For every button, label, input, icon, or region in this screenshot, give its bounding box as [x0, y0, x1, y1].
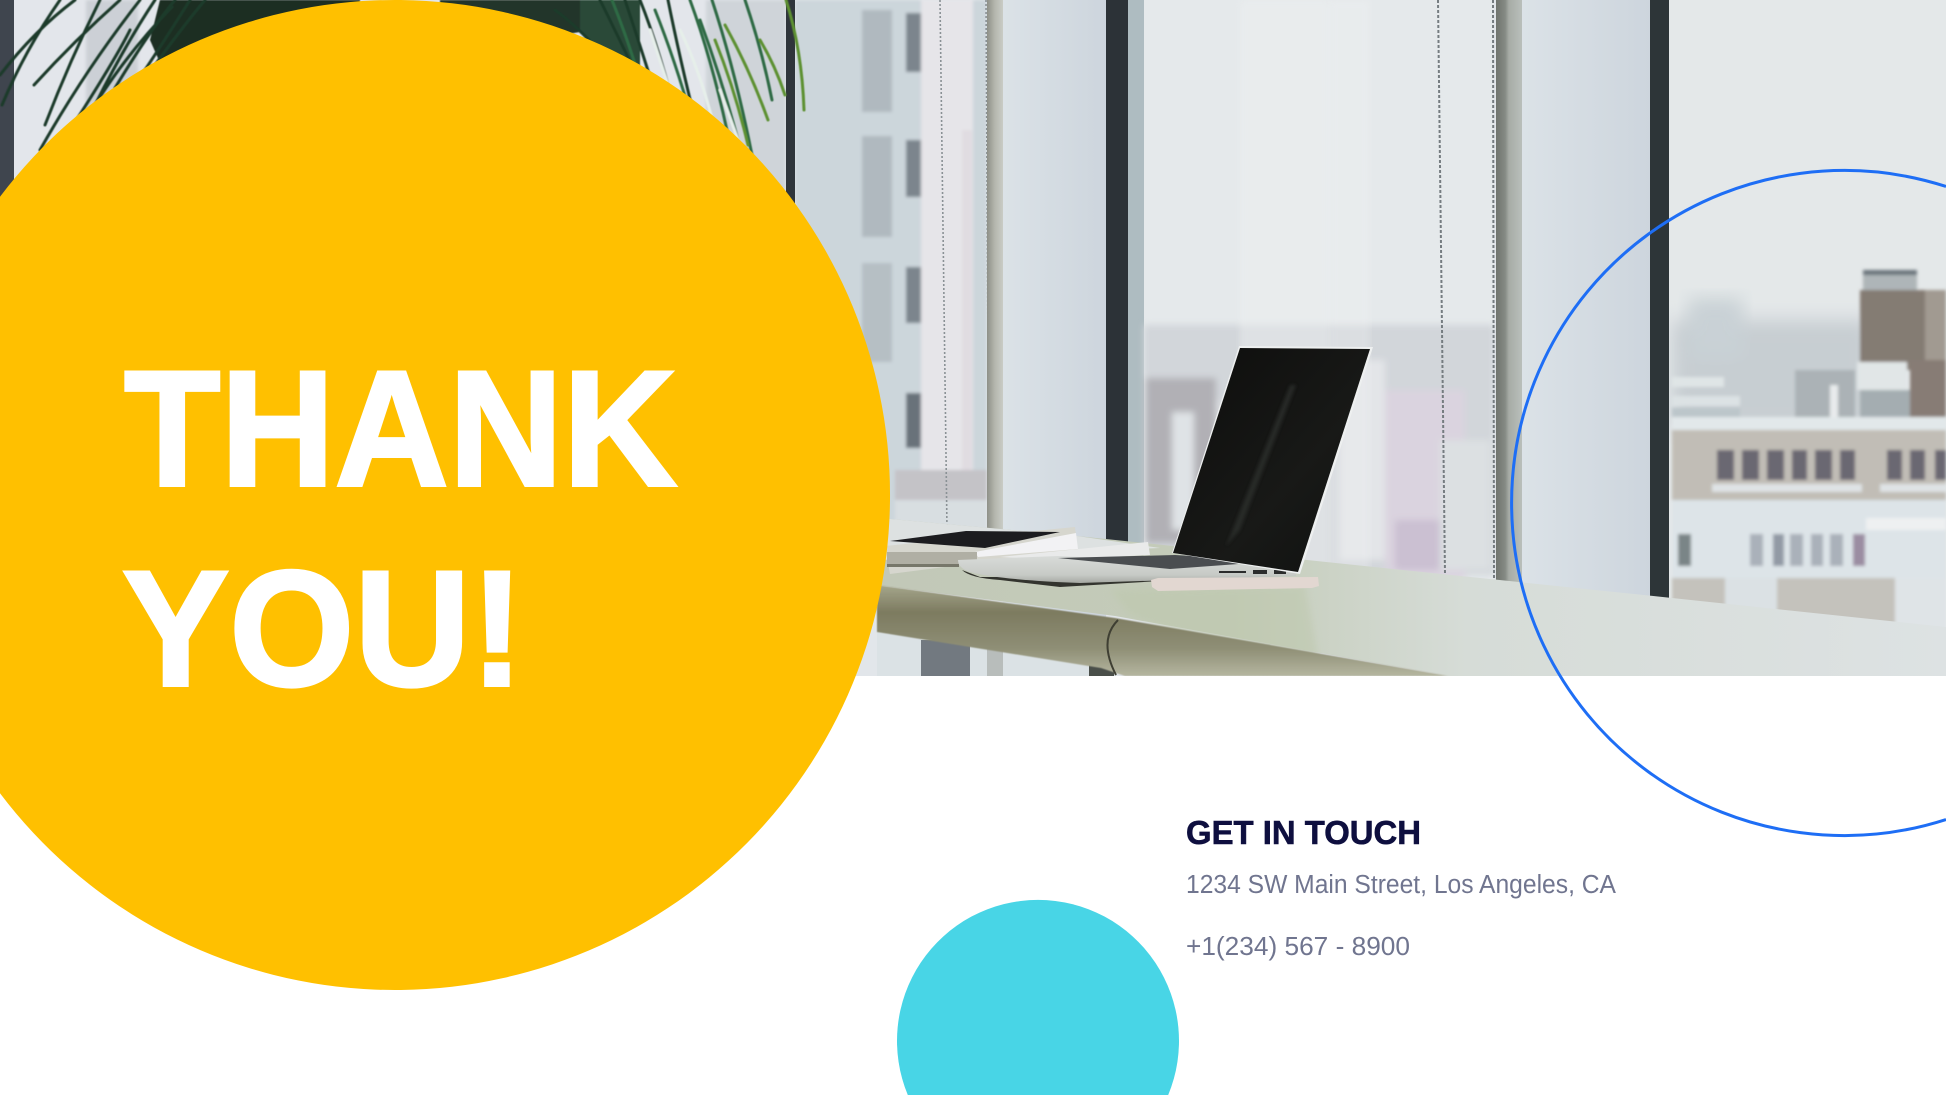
ports [1219, 570, 1286, 574]
building outside the left window [795, 0, 987, 560]
keyboard [1058, 555, 1239, 569]
laptop base [958, 556, 1296, 583]
blue outline circle [1512, 170, 1946, 835]
heading: get in touch: GET IN TOUCH [1186, 814, 1421, 851]
cyan circle [897, 900, 1179, 1095]
yellow circle [0, 0, 890, 990]
curtain chains left [940, 0, 989, 530]
city view in right window [1672, 270, 1946, 638]
books [885, 527, 1150, 574]
title line 1: THANK [124, 336, 677, 520]
right glass [1669, 0, 1946, 640]
tan mullion [987, 0, 1003, 560]
palm plant leaves [0, 0, 804, 155]
title: thank you [122, 336, 677, 720]
translucent curtain stripes [1242, 325, 1328, 562]
desk legs and lower background [921, 640, 1114, 676]
pale wall column right [1532, 0, 1650, 596]
desk top [877, 518, 1946, 676]
curtain chains centre [1438, 0, 1494, 580]
phone [1151, 577, 1319, 591]
phone number: +1(234) 567 - 8900 [1186, 933, 1410, 961]
laptop [958, 346, 1373, 587]
screen edge [1172, 346, 1373, 574]
desk reflection [1138, 588, 1319, 653]
desk front rounded edge [877, 585, 1449, 676]
desk back light zone [880, 518, 1160, 560]
dark frame right [1650, 0, 1669, 598]
far-left dark window frame [0, 0, 14, 197]
olive mullion [1496, 0, 1522, 585]
left window frame [786, 0, 795, 204]
screen reflection [1226, 385, 1296, 546]
desk seam [1107, 620, 1118, 675]
dark frame centre [1106, 0, 1128, 545]
screen [1173, 348, 1370, 572]
skyline behind centre glass [1144, 325, 1494, 580]
centre glass [1144, 0, 1494, 600]
pale wall column [1011, 0, 1106, 617]
laptop shadow [962, 570, 1160, 587]
photo: office desk with laptop by the window [0, 0, 1946, 676]
contact block [1186, 814, 1616, 961]
title line 2: YOU! [122, 536, 524, 720]
address: 1234 SW Main Street, Los Angeles, CA [1186, 871, 1616, 899]
